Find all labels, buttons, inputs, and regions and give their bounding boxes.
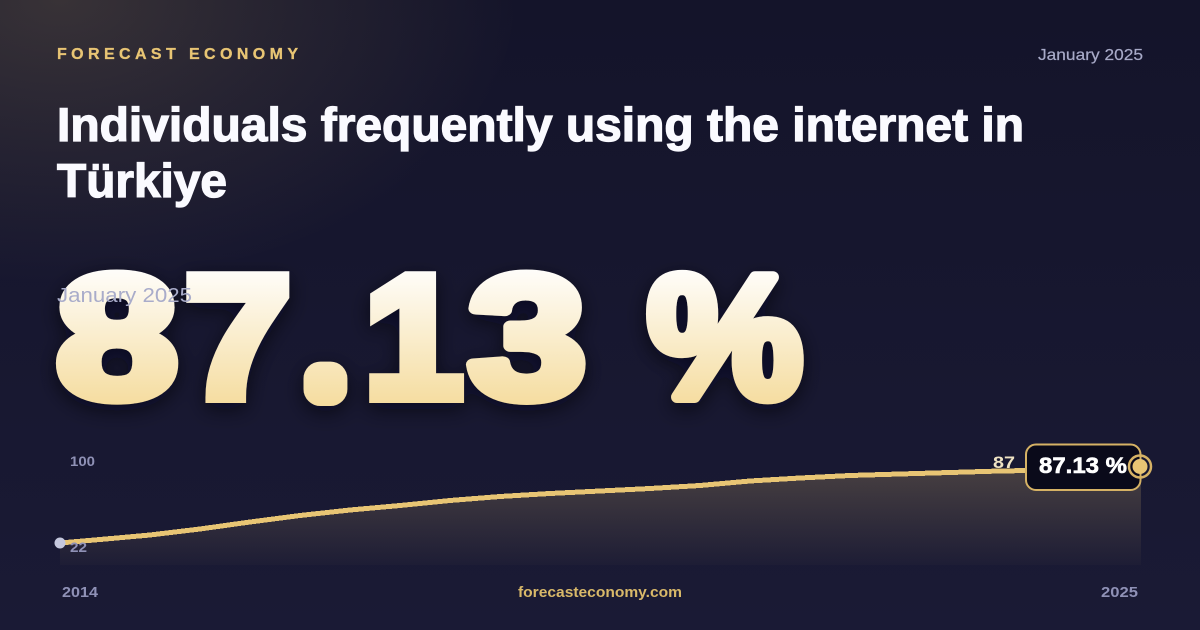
end value label: 87 (993, 453, 1015, 472)
axis label: 22: 22 (70, 539, 87, 555)
date, top right: January 2025 (1038, 47, 1143, 64)
big value: 8 (57, 240, 177, 434)
source url: forecasteconomy.com (518, 584, 682, 601)
big value: % (648, 239, 802, 434)
callout (1026, 444, 1140, 490)
brand label: FORECAST ECONOMY (57, 46, 298, 63)
chart line (60, 470, 1030, 543)
title (57, 98, 1024, 207)
callout: 87.13 % (1039, 453, 1127, 478)
axis label: 100: 100 (70, 453, 95, 469)
big value: 3 (468, 241, 586, 435)
big value: 7 (185, 239, 291, 434)
x axis start year: 2014 (62, 584, 99, 601)
x axis end year: 2025 (1101, 584, 1138, 601)
title: Türkiye (57, 154, 227, 207)
chart area fill (60, 468, 1141, 565)
big value: 1 (364, 241, 463, 435)
start point (54, 538, 66, 548)
big value (57, 239, 802, 435)
big value: . (316, 326, 335, 404)
title: Individuals frequently using the internet in (57, 98, 1024, 151)
end marker (1129, 456, 1151, 478)
overlapping date label: January 2025 (57, 284, 192, 307)
line chart (54, 444, 1151, 565)
